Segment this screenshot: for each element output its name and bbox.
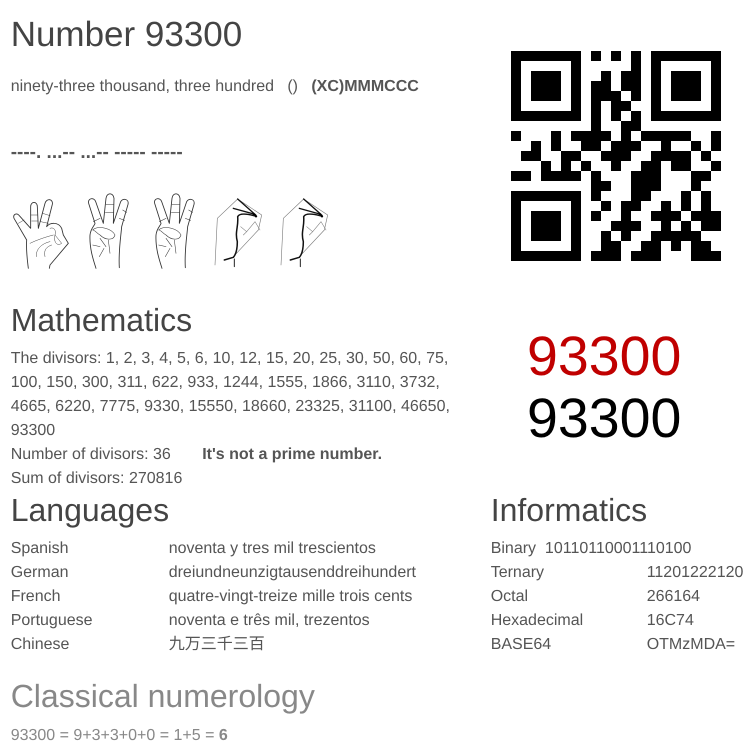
number in red: 93300 <box>527 325 681 387</box>
languages table: Spanish <box>11 540 69 557</box>
divisors text block: 100, 150, 300, 311, 622, 933, 1244, 1555, 1866, 3110, 3732, <box>11 374 440 391</box>
number in words and roman numeral: ninety-three thousand, three hundred () (XC)MMMCCC <box>11 78 419 95</box>
languages table: German <box>11 564 68 581</box>
icon: sign language hands <box>13 193 328 269</box>
informatics table: OTMzMDA= <box>647 636 735 653</box>
languages table: French <box>11 588 60 605</box>
languages table: noventa y tres mil trescientos <box>169 540 376 557</box>
informatics table: 266164 <box>647 588 700 605</box>
languages table: Portuguese <box>11 612 93 629</box>
informatics table: BASE64 <box>491 636 551 653</box>
languages table <box>11 540 416 653</box>
morse code: ----. ...-- ...-- ----- ----- <box>11 142 183 163</box>
informatics table: Ternary <box>491 564 544 581</box>
number in black: 93300 <box>527 387 681 449</box>
languages table: Chinese <box>11 636 69 653</box>
title: Number 93300 <box>11 15 242 54</box>
languages table: 九万三千三百 <box>169 636 265 653</box>
heading: Languages: Languages <box>11 492 169 528</box>
divisors text block: The divisors: 1, 2, 3, 4, 5, 6, 10, 12, 15, 20, 25, 30, 50, 60, 75, <box>11 350 448 367</box>
QR code <box>511 51 721 261</box>
informatics table: 16C74 <box>647 612 694 629</box>
languages table: dreiundneunzigtausenddreihundert <box>169 564 416 581</box>
informatics table: Hexadecimal <box>491 612 583 629</box>
informatics table: Binary 10110110001110100 <box>491 540 691 557</box>
heading: Classical numerology: Classical numerology <box>11 678 315 714</box>
divisors text block: Number of divisors: 36 It's not a prime number. <box>11 446 382 463</box>
languages table: noventa e três mil, trezentos <box>169 612 370 629</box>
informatics table: 11201222120 <box>647 564 743 581</box>
divisors text block: 93300 <box>11 422 55 439</box>
informatics table <box>491 540 743 653</box>
divisors text block: Sum of divisors: 270816 <box>11 470 182 487</box>
heading: Informatics: Informatics <box>491 492 647 528</box>
informatics table: Octal <box>491 588 528 605</box>
divisors text block <box>11 350 450 487</box>
numerology calculation: 93300 = 9+3+3+0+0 = 1+5 = 6 <box>11 727 228 744</box>
languages table: quatre-vingt-treize mille trois cents <box>169 588 412 605</box>
divisors text block: 4665, 6220, 7775, 9330, 15550, 18660, 23325, 31100, 46650, <box>11 398 450 415</box>
heading: Mathematics: Mathematics <box>11 302 192 338</box>
